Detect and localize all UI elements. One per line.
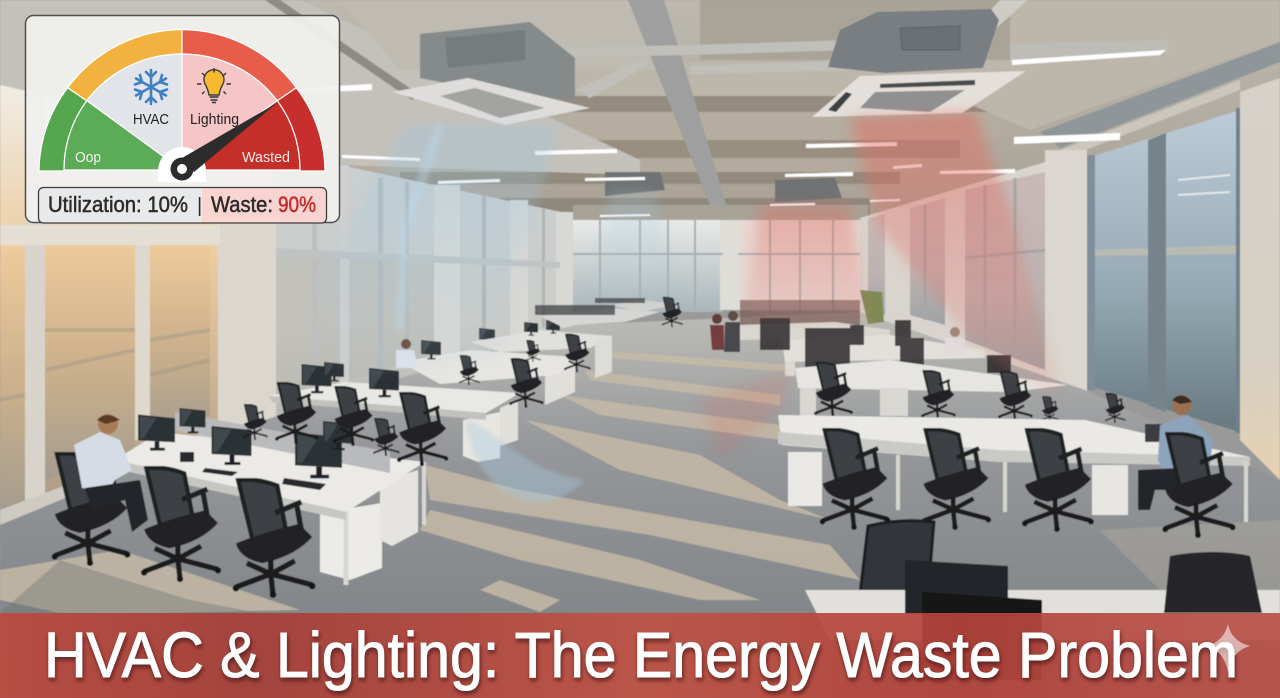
utilization and waste readout: Waste: [211, 192, 273, 217]
gauge needle [170, 103, 277, 180]
gauge labels: Lighting [190, 112, 239, 128]
ceiling light fixtures [300, 40, 1168, 217]
desk top [115, 432, 425, 512]
drawers [320, 503, 382, 580]
title banner [0, 613, 1280, 698]
right desk near [778, 415, 1250, 532]
utilization and waste readout [38, 188, 326, 223]
gauge labels [75, 112, 290, 166]
icon: light bulb [197, 68, 231, 102]
right desk middle [795, 327, 1126, 423]
gauge inner wedges [64, 54, 300, 170]
utilization and waste readout: | [197, 195, 202, 217]
panel background [26, 16, 340, 222]
gauge labels: Wasted [242, 149, 290, 166]
sunlight stripes on floor [0, 350, 1280, 613]
AC cassette right [812, 9, 1026, 117]
cable tray [628, 0, 728, 210]
desk cluster 3 [545, 358, 575, 405]
far AC cassettes [605, 172, 842, 202]
right window wall [860, 78, 1280, 480]
warm airflow beams [700, 112, 1060, 460]
desk cluster 4 [470, 330, 612, 352]
chairs near left [52, 454, 316, 598]
icon: sparkle watermark [1207, 624, 1250, 672]
utilization and waste readout: Utilization: 10% [48, 192, 188, 217]
gauge labels: Oop [75, 149, 101, 166]
banner background [0, 613, 1280, 698]
far window wall [573, 205, 868, 312]
left desk cluster near [115, 408, 425, 585]
seated man right [1138, 395, 1236, 538]
right desk cluster far [710, 290, 1011, 376]
cold airflow beams [320, 125, 680, 502]
AC cassette left [392, 22, 590, 125]
divider [175, 412, 390, 473]
left desk cluster 2 [243, 297, 683, 466]
foreground desk with monitors [805, 521, 1280, 680]
ducts [540, 40, 860, 98]
gauge hub cut-out [158, 147, 206, 182]
gauge labels: HVAC [133, 112, 169, 128]
seated man left [74, 414, 148, 532]
icon: snowflake [135, 70, 167, 104]
far desks [540, 308, 660, 326]
shadow bands on floor [0, 560, 260, 613]
utilization and waste readout: 90% [278, 192, 316, 217]
left window wall [0, 85, 575, 525]
foreground chair back [860, 521, 934, 594]
gauge outer band [39, 30, 325, 171]
gauge panel [26, 16, 340, 223]
carpet floor [0, 312, 1280, 698]
ceiling [0, 0, 1280, 240]
